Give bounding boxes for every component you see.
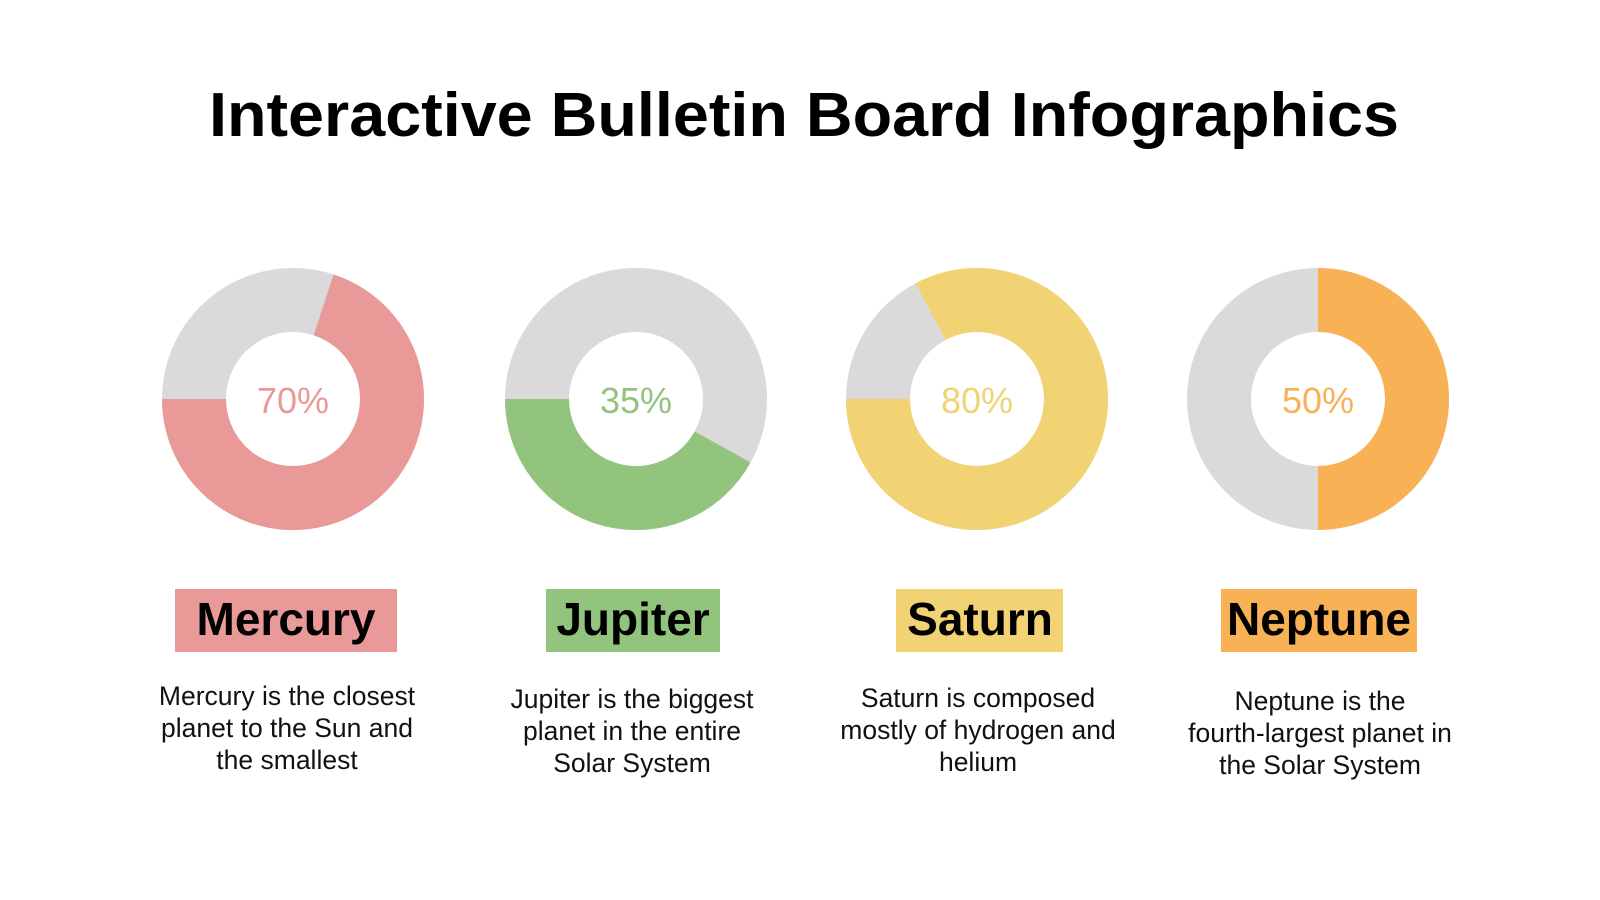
text: neptune description: Neptune is the xyxy=(1235,686,1405,716)
label: mercury xyxy=(175,589,397,652)
text: mercury description: the smallest xyxy=(216,745,358,775)
text: mercury description xyxy=(159,681,415,775)
text: saturn description xyxy=(840,683,1116,777)
text: jupiter description: Solar System xyxy=(553,748,711,778)
text: jupiter description: Jupiter is the biggest xyxy=(510,684,754,714)
text: jupiter description: planet in the entire xyxy=(523,716,741,746)
text: jupiter description xyxy=(510,684,754,778)
text: saturn description: Saturn is composed xyxy=(861,683,1095,713)
title: Interactive Bulletin Board Infographics xyxy=(209,81,1399,150)
text: neptune description: the Solar System xyxy=(1219,750,1421,780)
text: neptune description: fourth-largest planet in xyxy=(1188,718,1452,748)
donut: neptune 50%: 50% xyxy=(1282,380,1354,421)
text: neptune description xyxy=(1188,686,1452,780)
donut: neptune 50% xyxy=(1219,300,1417,498)
donut: saturn 80% xyxy=(878,300,1076,498)
donut: mercury 70%: 70% xyxy=(257,380,329,421)
donut: jupiter 35% xyxy=(537,300,735,498)
text: mercury description: planet to the Sun and xyxy=(161,713,413,743)
text: mercury description: Mercury is the closest xyxy=(159,681,415,711)
donut: mercury 70% xyxy=(194,300,392,498)
donut: saturn 80%: 80% xyxy=(941,380,1013,421)
text: saturn description: helium xyxy=(939,747,1017,777)
label: mercury: Mercury xyxy=(197,593,376,645)
label: neptune: Neptune xyxy=(1227,593,1411,645)
text: saturn description: mostly of hydrogen and xyxy=(840,715,1116,745)
label: saturn: Saturn xyxy=(907,593,1053,645)
label: jupiter: Jupiter xyxy=(556,593,710,645)
donut: jupiter 35%: 35% xyxy=(600,380,672,421)
